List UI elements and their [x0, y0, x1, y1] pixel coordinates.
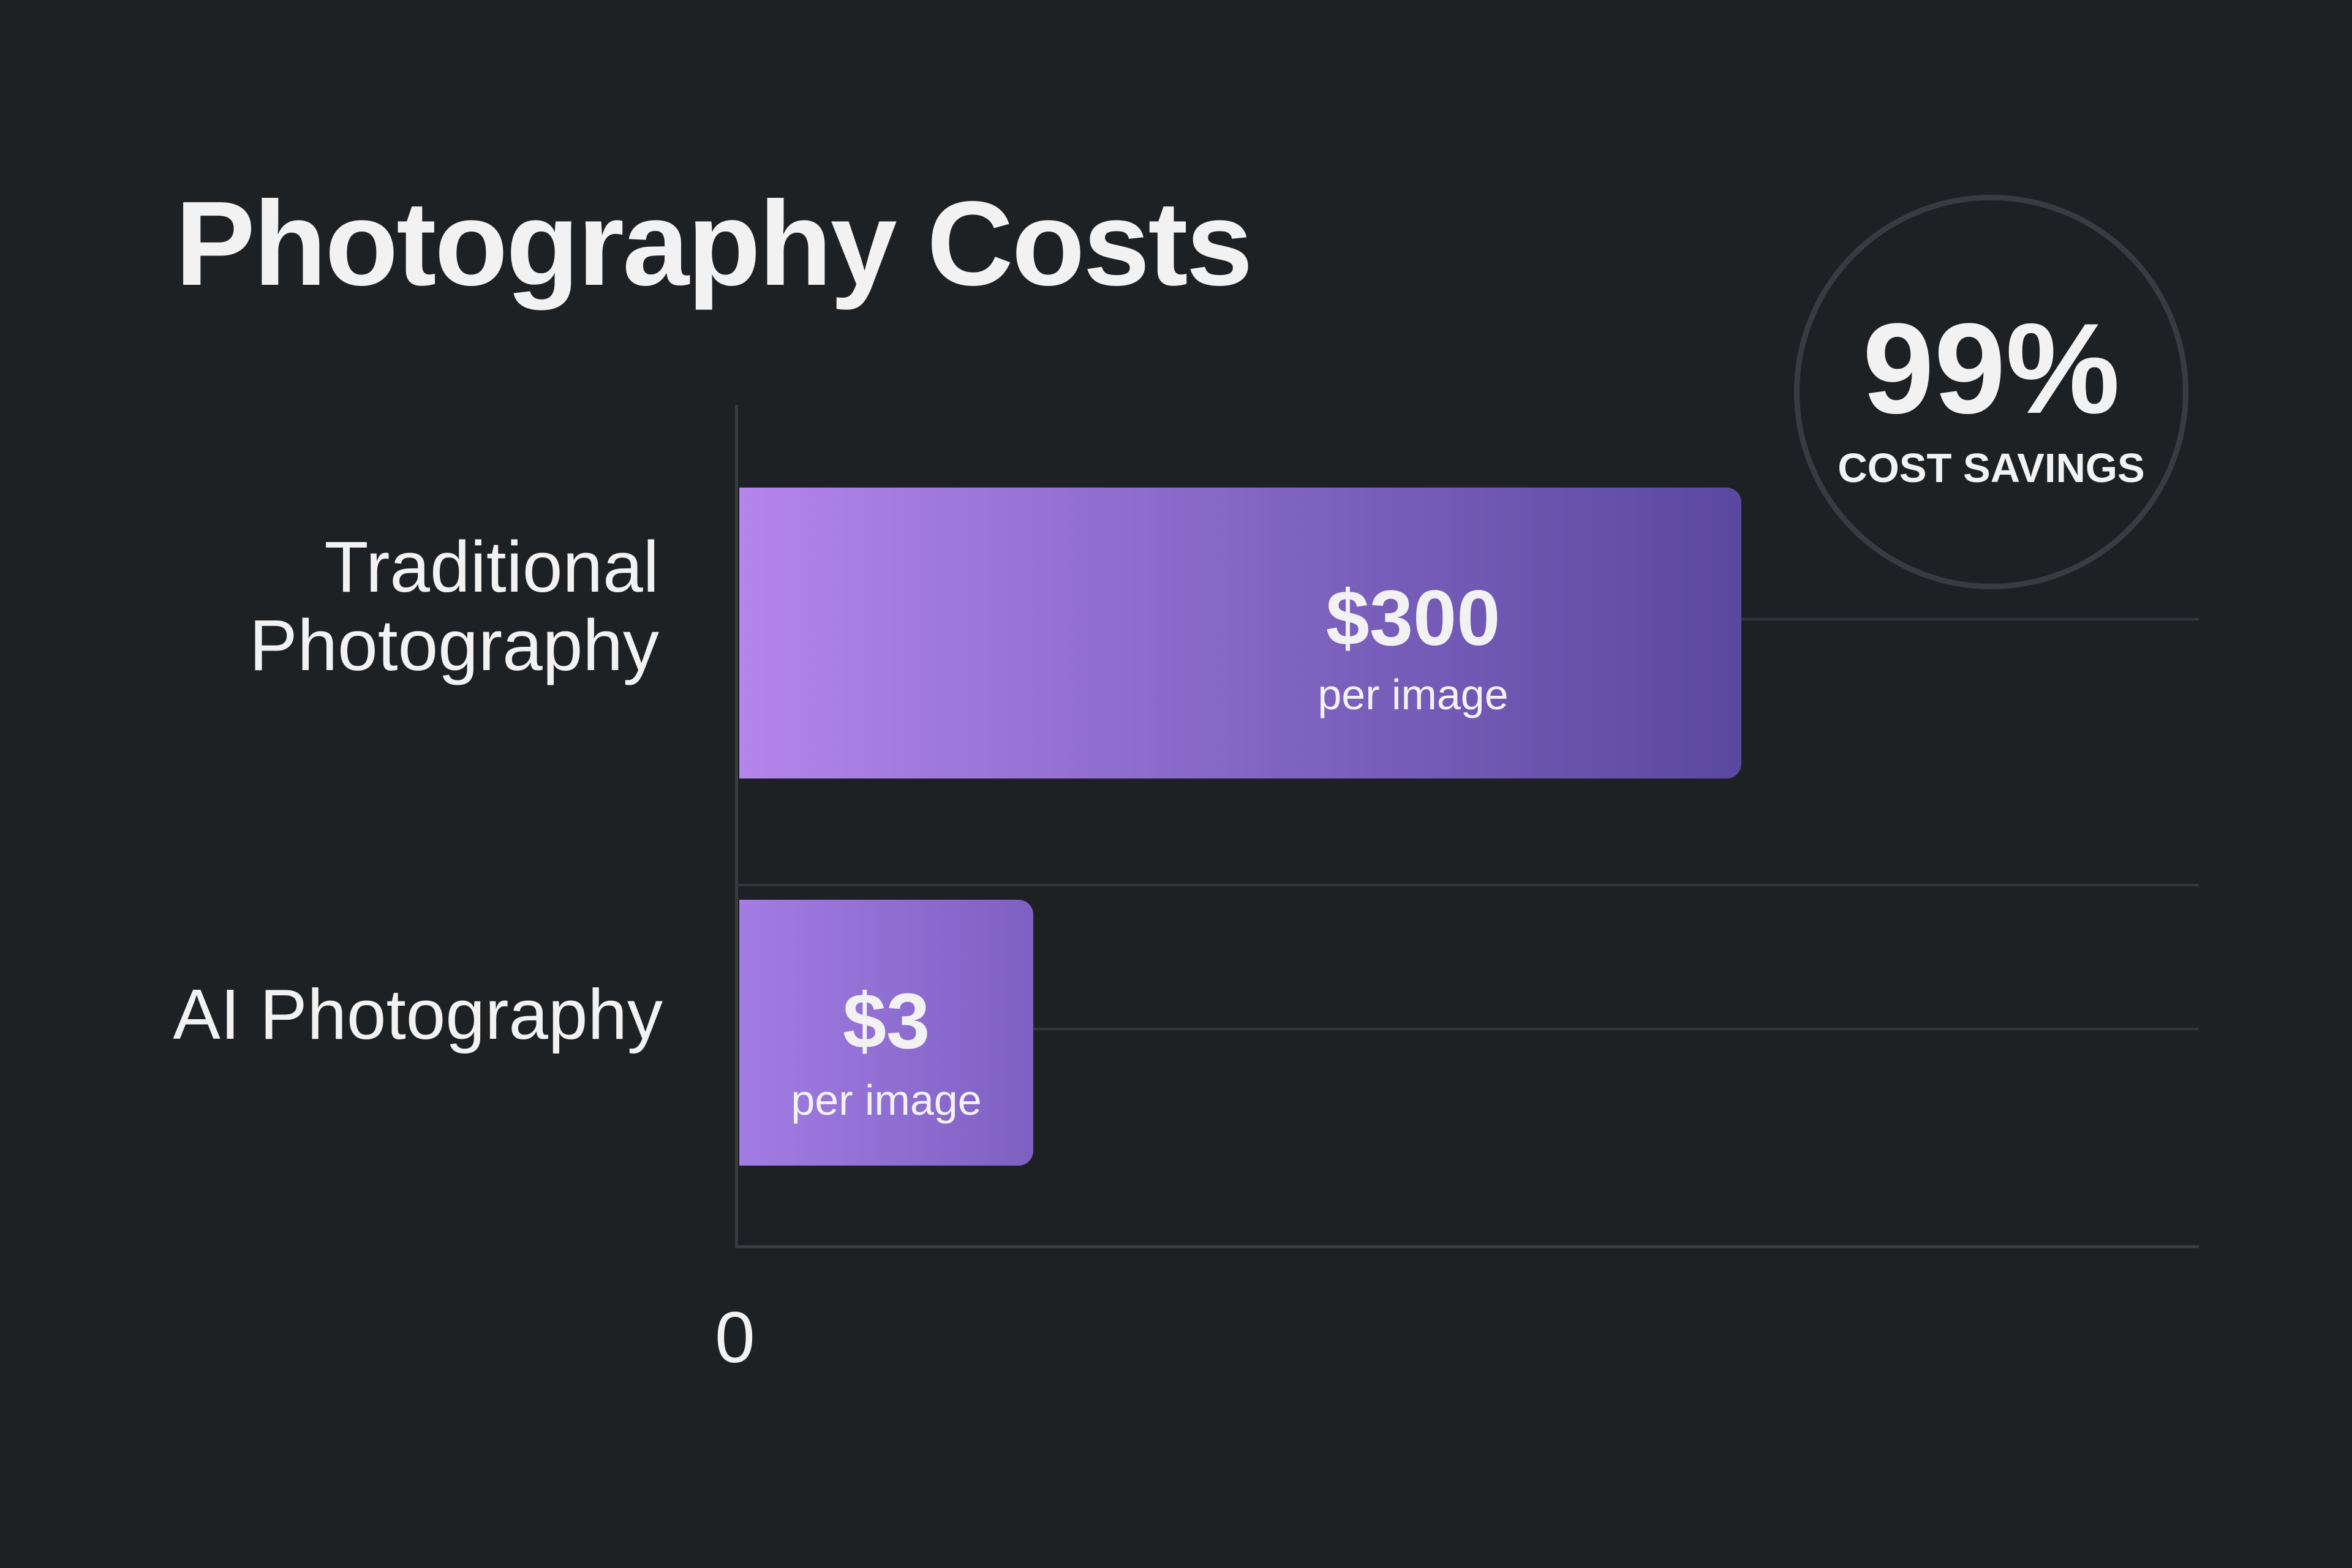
bar: AI photography: [739, 900, 1033, 1166]
y axis: [735, 405, 738, 1248]
label: traditional photography: Photography: [249, 605, 659, 686]
bar unit: per image: [791, 1076, 982, 1124]
label: traditional photography: Traditional: [324, 527, 659, 608]
bar value $300: $300: [1326, 575, 1500, 662]
label: AI photography: AI Photography: [173, 974, 663, 1054]
callout: 99% cost savings circle: [1794, 195, 2188, 589]
callout number: 99%: [1863, 296, 2120, 440]
axis tick label 0: 0: [715, 1297, 755, 1378]
bar unit: per image: [1317, 671, 1509, 718]
bar: traditional photography: [739, 488, 1741, 778]
callout label: COST SAVINGS: [1838, 445, 2145, 491]
label: traditional photography: [249, 527, 659, 686]
bar value $3: $3: [843, 978, 930, 1065]
x axis baseline: [735, 1245, 2199, 1248]
title: Photography Costs: [175, 176, 1251, 311]
